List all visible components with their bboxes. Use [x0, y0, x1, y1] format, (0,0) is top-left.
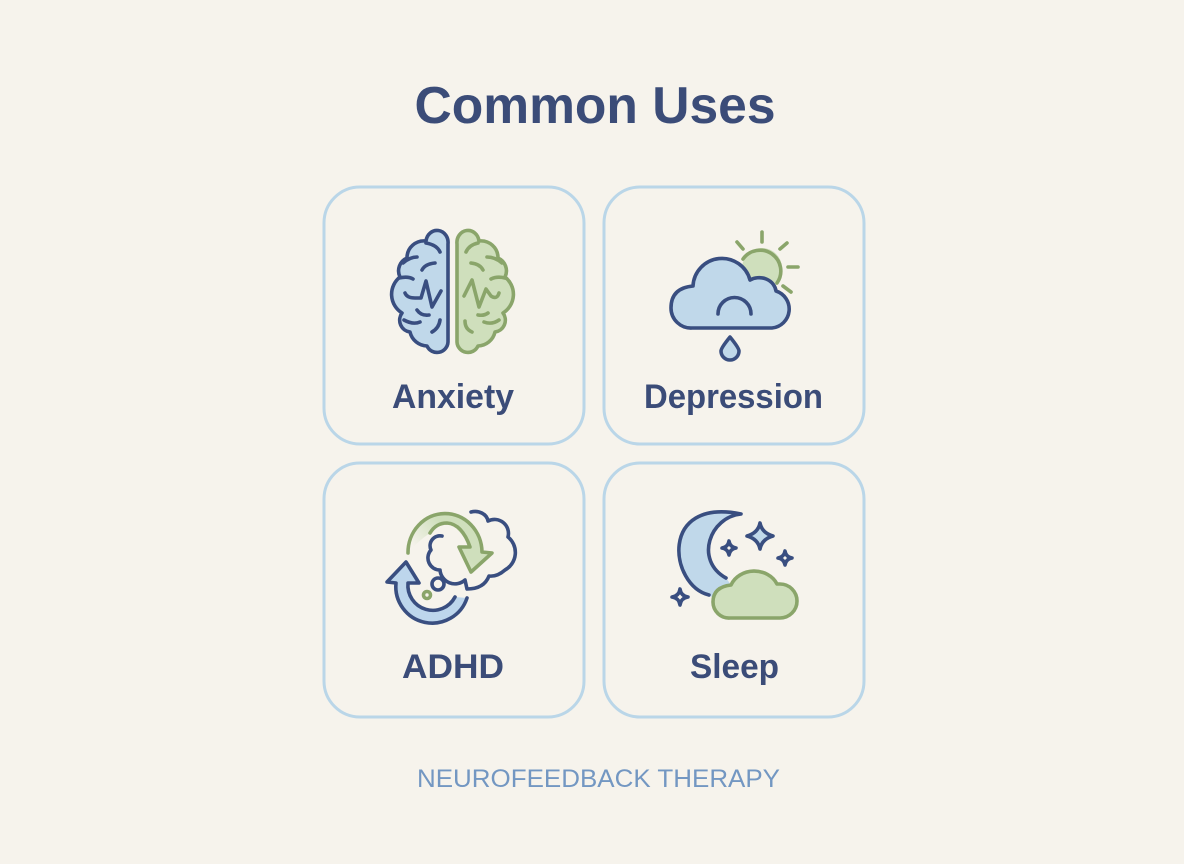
icon: brain [392, 230, 513, 352]
title: Common Uses [414, 77, 776, 135]
panel: depression [604, 187, 864, 444]
label: Depression: Depression [644, 378, 823, 416]
panel: sleep [604, 463, 864, 717]
label: ADHD: ADHD [402, 648, 504, 686]
panel: anxiety [324, 187, 584, 444]
label: Anxiety: Anxiety [392, 378, 514, 416]
icon: cloud with sun and raindrop [671, 232, 798, 360]
panel: ADHD [324, 463, 584, 717]
footer caption: NEUROFEEDBACK THERAPY [417, 765, 780, 793]
icon: moon, stars and cloud [672, 512, 797, 618]
icon: cycling arrows and thought cloud [387, 511, 515, 623]
label: Sleep: Sleep [690, 648, 779, 686]
